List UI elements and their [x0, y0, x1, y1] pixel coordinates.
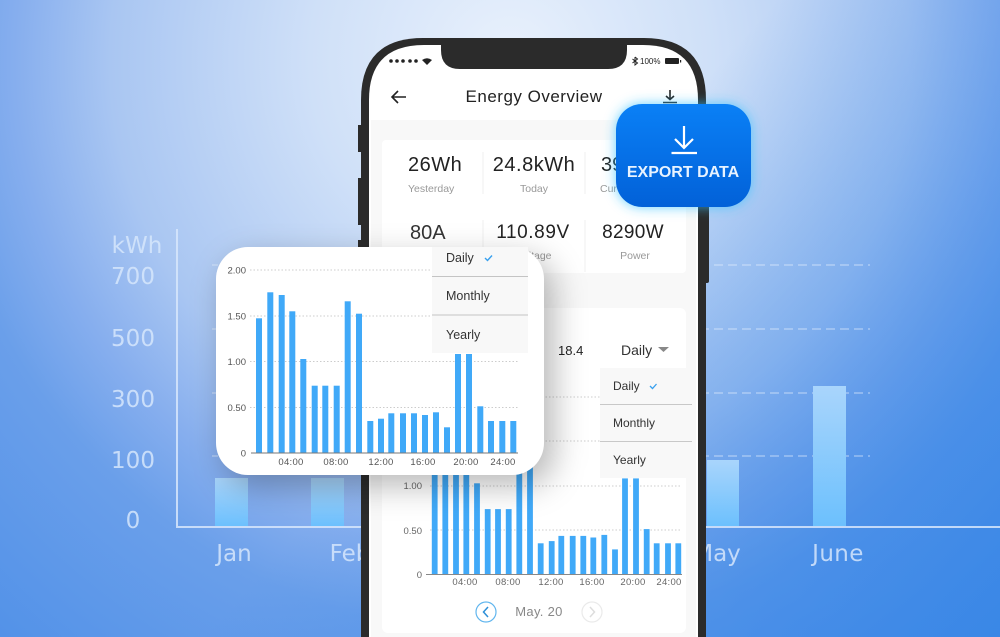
- chart gridlines: [212, 265, 870, 456]
- phone: [358, 38, 709, 637]
- y axis labels: kWh: [112, 233, 162, 259]
- phone chart x labels: 04:00: [452, 577, 478, 588]
- status bar: [389, 57, 681, 66]
- phone chart x labels: 12:00: [538, 577, 564, 588]
- phone chart y labels: 0.50: [404, 526, 422, 537]
- stat: amps: 80A: [410, 222, 446, 244]
- date navigator: [476, 602, 602, 622]
- phone side buttons: [358, 125, 709, 287]
- chart summary value: 18.4: [558, 343, 583, 358]
- stat: today: [493, 154, 575, 195]
- y axis labels: 0: [126, 508, 140, 534]
- overlay x labels: [278, 457, 516, 468]
- phone notch: [441, 44, 627, 69]
- battery status: 100%: [640, 57, 660, 66]
- overlay bars: [256, 292, 516, 453]
- phone chart gridlines: [430, 397, 682, 530]
- header download icon: [663, 90, 677, 102]
- stat: yesterday: Yesterday: [408, 183, 455, 195]
- monthly option: Monthly: [446, 289, 491, 303]
- signal dots and wifi: [389, 58, 432, 65]
- daily option: Daily: [446, 251, 475, 265]
- phone chart y labels: 1.00: [404, 481, 422, 492]
- yearly option: Yearly: [613, 453, 646, 467]
- stat: power: [602, 222, 664, 262]
- period selector: [621, 342, 669, 358]
- phone chart x labels: 24:00: [656, 577, 682, 588]
- stat: current, partly hidden: 39: [601, 154, 623, 176]
- previous date button: [476, 602, 496, 622]
- x axis labels: Feb: [330, 541, 370, 567]
- daily option: Daily: [613, 379, 640, 393]
- stat: power: 8290W: [602, 222, 664, 243]
- phone chart baseline: [426, 574, 682, 576]
- chart axes: [177, 229, 1000, 527]
- phone dropdown menu: [600, 368, 692, 478]
- x axis labels: [214, 541, 864, 567]
- overlay x labels: 16:00: [410, 457, 436, 468]
- stat: today: 24.8kWh: [493, 154, 575, 176]
- phone chart x labels: 20:00: [620, 577, 646, 588]
- overlay dropdown menu: [432, 247, 528, 353]
- stat: current, partly hidden: [600, 154, 623, 195]
- overlay baseline: [251, 452, 518, 454]
- overlay x labels: 12:00: [368, 457, 394, 468]
- phone chart bars: [432, 419, 681, 574]
- download icon: [672, 126, 697, 153]
- screen title: Energy Overview: [466, 87, 603, 106]
- yearly option: Yearly: [446, 328, 481, 342]
- overlay gridlines: [250, 270, 518, 408]
- stat: voltage: [496, 222, 570, 262]
- y axis labels: [111, 233, 162, 534]
- stat: voltage: Voltage: [516, 250, 552, 262]
- button label: EXPORT DATA: [627, 164, 740, 181]
- overlay x labels: 08:00: [323, 457, 349, 468]
- back arrow: [392, 91, 406, 103]
- x axis labels: Jan: [214, 541, 252, 567]
- export data button: [616, 104, 751, 207]
- overlay x labels: 24:00: [490, 457, 516, 468]
- overlay y labels: 1.00: [228, 357, 246, 368]
- battery status: [632, 57, 681, 66]
- phone chart x labels: [452, 577, 682, 588]
- y axis labels: 500: [111, 326, 155, 352]
- phone chart x labels: 08:00: [495, 577, 521, 588]
- stat: current, partly hidden: Cur: [600, 183, 617, 195]
- y axis labels: 700: [111, 264, 155, 290]
- panel: overlay chart card: [216, 247, 554, 486]
- next date button: [582, 602, 602, 622]
- period selector: Daily: [621, 342, 652, 358]
- overlay y labels: 1.50: [228, 312, 246, 322]
- monthly option: Monthly: [613, 416, 655, 430]
- x axis labels: June: [810, 541, 864, 567]
- stat: yesterday: [408, 154, 462, 195]
- overlay x labels: 20:00: [453, 457, 479, 468]
- panel: phone chart: [382, 308, 686, 633]
- overlay y labels: 0: [241, 448, 246, 460]
- phone chart y labels: 0: [417, 570, 422, 581]
- overlay y labels: 2.00: [228, 266, 246, 276]
- stat: power: Power: [620, 250, 650, 262]
- phone chart y labels: [404, 481, 422, 581]
- app header: [392, 87, 677, 106]
- stat: yesterday: 26Wh: [408, 154, 462, 176]
- card shadow: [224, 258, 554, 486]
- phone chart x labels: 16:00: [579, 577, 605, 588]
- date label: May. 20: [515, 604, 563, 619]
- button body: [616, 104, 751, 207]
- stat: today: Today: [520, 183, 549, 195]
- phone body: [361, 38, 706, 637]
- stat: voltage: 110.89V: [496, 222, 570, 243]
- panel: stats: [382, 140, 686, 273]
- button glow: [616, 104, 751, 207]
- grey content background: [371, 120, 696, 637]
- overlay x labels: 04:00: [278, 457, 304, 468]
- card body: [216, 247, 544, 475]
- background bar chart: [111, 229, 1000, 567]
- chart bars: [215, 386, 846, 526]
- x axis labels: May: [693, 541, 741, 567]
- y axis labels: 300: [111, 387, 155, 413]
- overlay y labels: 0.50: [228, 403, 246, 414]
- y axis labels: 100: [111, 448, 155, 474]
- phone screen: [369, 45, 698, 637]
- overlay y labels: [228, 266, 246, 460]
